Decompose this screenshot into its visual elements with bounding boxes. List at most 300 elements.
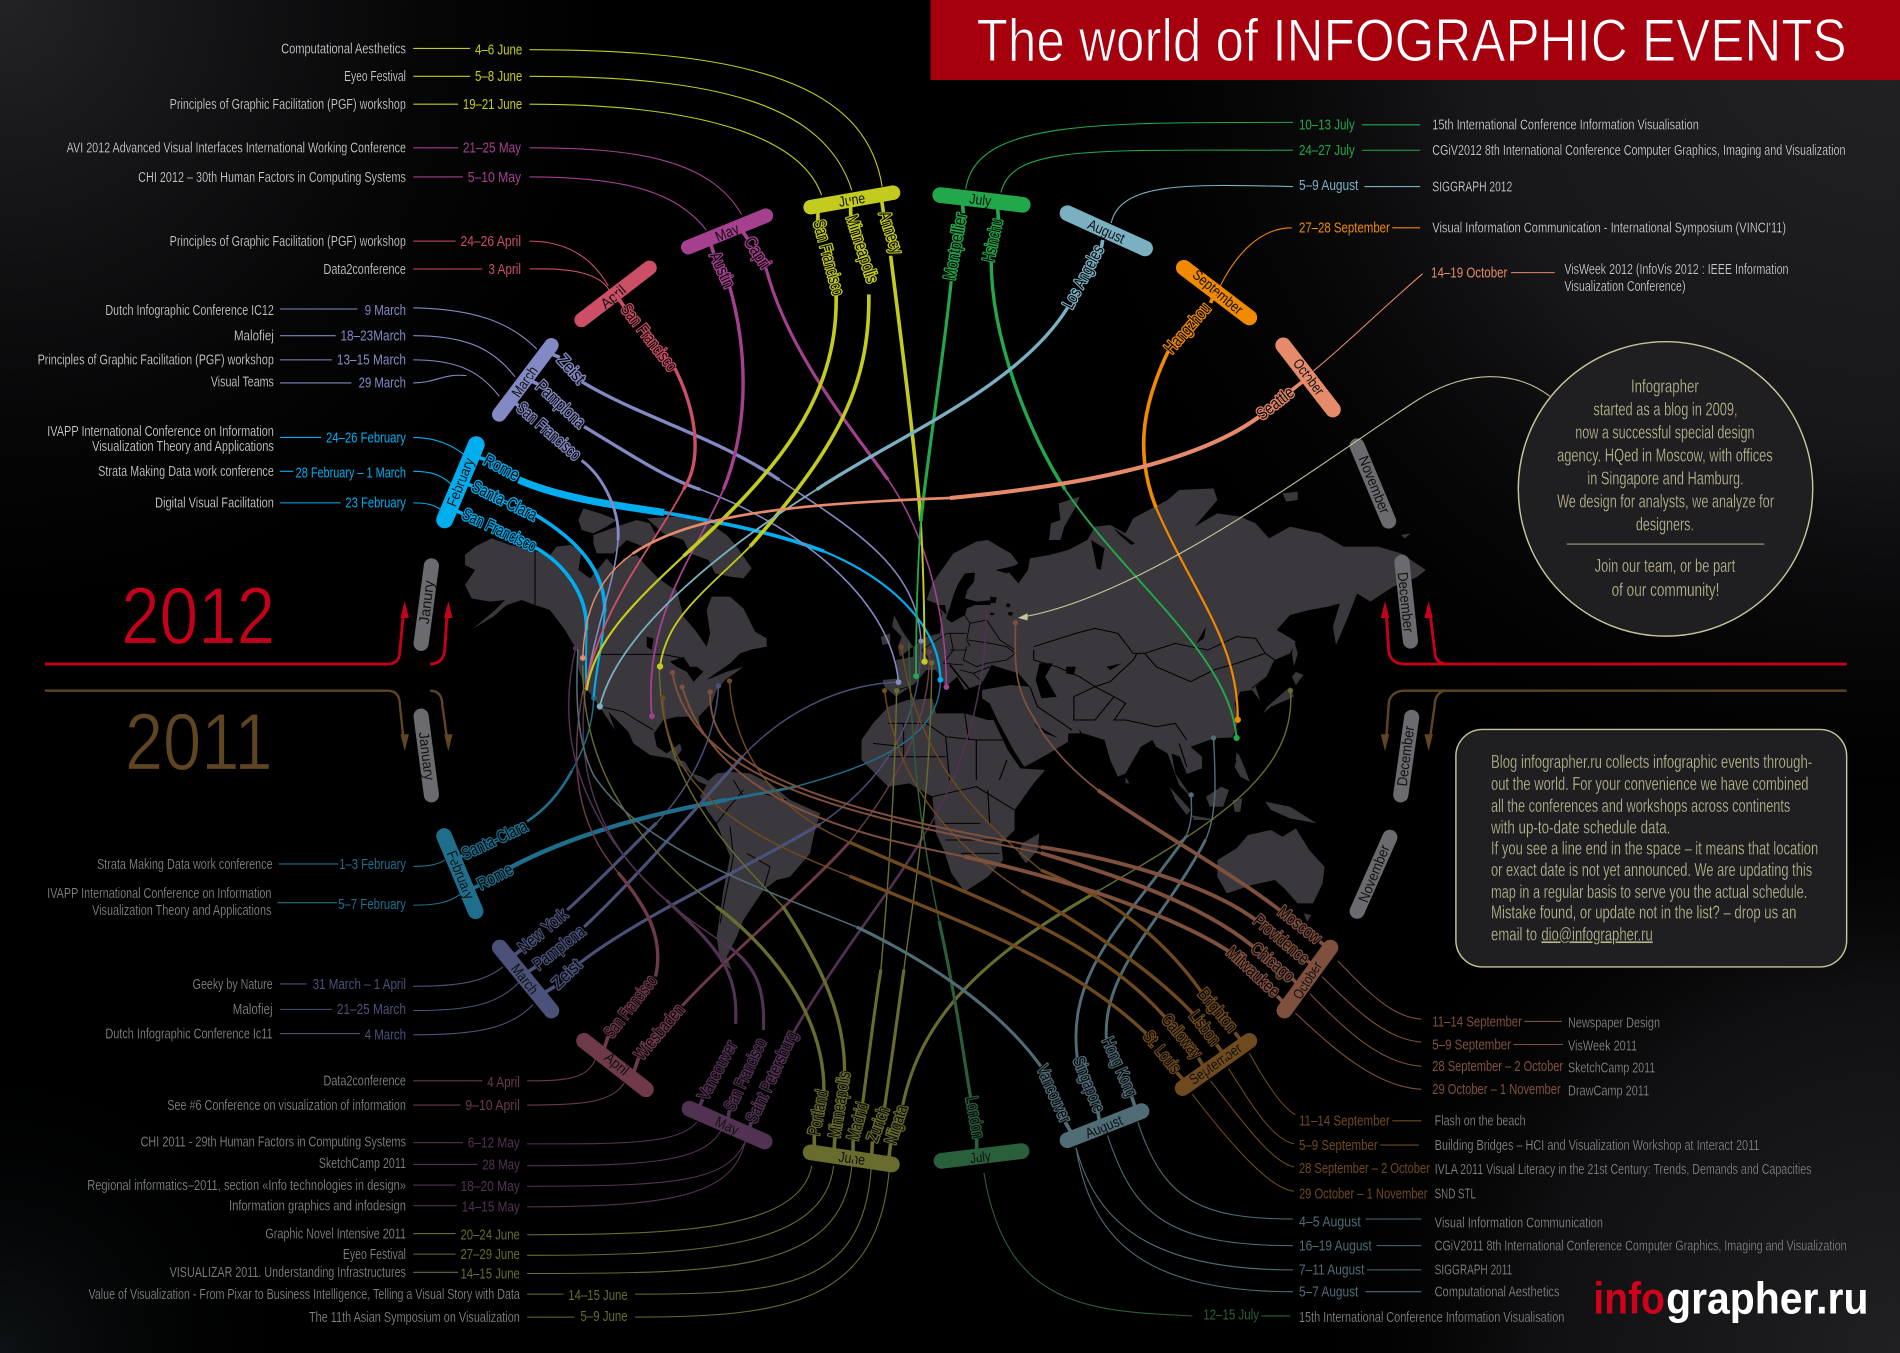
August 2011 bar: August bbox=[1083, 1113, 1125, 1142]
map: Europe detail bbox=[897, 573, 1015, 690]
October 2012 bar bbox=[1283, 345, 1333, 410]
event: Malofiej 2011: 21–25 March bbox=[337, 1001, 406, 1018]
event: VisWeek 2011: VisWeek 2011 bbox=[1568, 1038, 1637, 1055]
event: SIGGRAPH 2011: SIGGRAPH 2011 bbox=[1435, 1262, 1512, 1279]
event: Dutch Infographic Conference 2011 bbox=[105, 1005, 533, 1044]
event: AVI 2012 bbox=[67, 140, 742, 214]
event: Geeky by Nature bbox=[193, 967, 503, 993]
event: See #6: See #6 Conference on visualization of information bbox=[167, 1097, 406, 1114]
event: 15th International Conference 2012: 10–13 July bbox=[1299, 117, 1355, 134]
June 2011 bar bbox=[811, 1149, 892, 1169]
route: Chicago bbox=[670, 670, 1300, 988]
route: Los Angeles: Los Angeles bbox=[1059, 242, 1108, 312]
month: February 2011 bbox=[47, 682, 940, 919]
panel: about Infographer circle: now a successful special design bbox=[1575, 423, 1755, 443]
event: CHI 2011: CHI 2011 - 29th Human Factors in Computing Systems bbox=[141, 1133, 406, 1150]
event: SketchCamp May 2011: SketchCamp 2011 bbox=[319, 1155, 406, 1172]
event: DrawCamp 2011 bbox=[1295, 1013, 1649, 1099]
event: CHI 2012 bbox=[138, 169, 706, 230]
route: Lisbon: Lisbon bbox=[1185, 1007, 1224, 1049]
event: 12–15 July: 12–15 July bbox=[1203, 1307, 1259, 1324]
event: SketchCamp May 2011: 28 May bbox=[482, 1156, 520, 1173]
event: Graphic Novel: 20–24 June bbox=[460, 1227, 520, 1244]
month: December 2011: December bbox=[1395, 725, 1418, 787]
route: Zeist: Zeist bbox=[553, 351, 589, 388]
route: San Francisco bbox=[585, 294, 695, 689]
route: New York: New York bbox=[515, 905, 572, 957]
route: San Francisco: San Francisco bbox=[459, 505, 540, 556]
panel: about Infographer circle: We design for analysts, we analyze for bbox=[1557, 492, 1774, 512]
event: Building Bridges bbox=[1229, 1069, 1759, 1154]
route: Moscow bbox=[1013, 620, 1329, 949]
event: 12–15 July bbox=[984, 1173, 1564, 1326]
route: Chicago: Chicago bbox=[1247, 939, 1298, 986]
event: VINCI bbox=[1220, 220, 1786, 286]
month: March 2012 bbox=[38, 302, 924, 687]
route: San Francisco bbox=[511, 398, 618, 687]
event: Regional informatics: Regional informatics–2011, section «Info technologies in design» bbox=[87, 1177, 406, 1194]
event: SIGGRAPH 2011 bbox=[1076, 1147, 1512, 1279]
event: IVAPP 2012 bbox=[47, 423, 467, 457]
route: Providence bbox=[707, 689, 1315, 968]
route: Montpellier bbox=[913, 200, 971, 679]
July 2012 bar: July bbox=[968, 192, 993, 210]
route: Santa-Clara bbox=[454, 695, 596, 863]
May 2012 bar bbox=[688, 216, 766, 247]
route: Minneapolis bbox=[657, 201, 882, 670]
event: Geeky by Nature: Geeky by Nature bbox=[193, 976, 273, 993]
event: 15th International Conference 2012 bbox=[966, 117, 1699, 189]
route: Milwaukee: Milwaukee bbox=[1223, 943, 1283, 1001]
event: VisWeek 2011: 5–9 September bbox=[1432, 1036, 1511, 1053]
year timeline 2011: 2011 bbox=[125, 697, 273, 787]
event: VisWeek 2012: VisWeek 2012 (InfoVis 2012 : IEEE Information bbox=[1564, 261, 1789, 278]
month: January 2012: Janury bbox=[417, 579, 438, 625]
event: Regional informatics bbox=[87, 1141, 745, 1195]
route: Moscow: Moscow bbox=[1274, 902, 1325, 948]
event: SIGGRAPH 2012: SIGGRAPH 2012 bbox=[1432, 178, 1512, 195]
event: Principles of Graphic Facilitation June: 19–21 June bbox=[463, 96, 522, 113]
March 2012 bar: March bbox=[509, 364, 542, 401]
route: Zeist bbox=[545, 351, 924, 644]
event: Data2conference: 3 April bbox=[488, 261, 521, 278]
month: August 2011 bbox=[577, 649, 1847, 1301]
February 2011 bar: February bbox=[443, 849, 477, 902]
event: Dutch Infographic Conference 2011: 4 March bbox=[365, 1027, 406, 1044]
event: Computational Aesthetics 2011 bbox=[1076, 1147, 1560, 1301]
route: Niigata: Niigata bbox=[881, 1102, 912, 1147]
month: April 2012 bbox=[170, 233, 695, 689]
route: Zeist: Zeist bbox=[548, 955, 586, 993]
event: Visual Teams bbox=[211, 374, 467, 392]
route: Galloway: Galloway bbox=[1158, 1010, 1206, 1063]
event: Principles of Graphic Facilitation June: Principles of Graphic Facilitation (PGF) workshop bbox=[170, 96, 406, 113]
event: IVAPP 2011: IVAPP International Conference on Information bbox=[47, 885, 271, 902]
event: Newspaper Design bbox=[1338, 961, 1660, 1032]
June 2012 bar bbox=[811, 191, 893, 211]
event: Flash on the beach bbox=[1249, 1053, 1526, 1130]
month: October 2011 bbox=[670, 620, 1660, 1099]
event: Visual Teams: Visual Teams bbox=[211, 374, 274, 391]
event: AVI 2012: AVI 2012 Advanced Visual Interfaces International Working Conference bbox=[67, 140, 406, 157]
event: Strata 2012: 28 February – 1 March bbox=[296, 464, 406, 481]
route: Rome: Rome bbox=[474, 860, 516, 894]
event: Eyeo Festival: Eyeo Festival bbox=[344, 68, 406, 85]
event: Dutch Infographic Conference: Dutch Infographic Conference IC12 bbox=[105, 302, 274, 319]
event: Value of Visualization bbox=[88, 1168, 871, 1304]
event: Principles of Graphic Facilitation April bbox=[170, 233, 608, 286]
month: July 2012 bbox=[913, 117, 1845, 741]
route: Santa-Clara: Santa-Clara bbox=[459, 816, 531, 863]
July 2011 bar: July bbox=[969, 1149, 992, 1167]
event: SketchCamp May 2011 bbox=[319, 1131, 721, 1173]
event: Principles of Graphic Facilitation March: Principles of Graphic Facilitation (PGF) workshop bbox=[38, 352, 274, 369]
route: Pamplona: Pamplona bbox=[532, 377, 590, 432]
event: VISUALIZAR: 14–15 June bbox=[460, 1265, 520, 1282]
event: IVAPP 2011 bbox=[47, 885, 460, 919]
event: Data2conference: Data2conference bbox=[324, 261, 406, 278]
event: Information graphics: 14–15 May bbox=[462, 1199, 520, 1216]
panel: about Infographer circle: in Singapore and Hamburg. bbox=[1587, 469, 1744, 489]
event: Dutch Infographic Conference 2011: Dutch Infographic Conference Ic11 bbox=[105, 1025, 273, 1042]
route: Rome: Rome bbox=[481, 450, 523, 485]
event: VisWeek 2012 bbox=[1314, 261, 1789, 371]
event: CGiV2011 bbox=[1108, 1135, 1847, 1254]
route: Vancouver bbox=[577, 649, 1075, 1137]
route: Saint Petersburg: Saint Petersburg bbox=[742, 1028, 801, 1126]
event: Strata 2011: 1–3 February bbox=[339, 856, 406, 873]
event: VisWeek 2012: 14–19 October bbox=[1431, 264, 1507, 281]
route: Minneapolis: Minneapolis bbox=[825, 1070, 854, 1139]
event: Visual Teams: 29 March bbox=[359, 375, 406, 392]
event: Principles of Graphic Facilitation March bbox=[38, 352, 499, 396]
March 2011 bar bbox=[500, 948, 551, 1011]
panel: about the blog: dio@infographer.ru bbox=[1541, 924, 1653, 944]
route: Rome bbox=[468, 450, 943, 683]
month: October 2012 bbox=[580, 261, 1789, 661]
month: May 2012 bbox=[67, 140, 949, 719]
event: Newspaper Design: 11–14 September bbox=[1432, 1013, 1522, 1030]
panel: about Infographer circle: Infographer bbox=[1631, 377, 1699, 397]
event: CHI 2012: 5–10 May bbox=[468, 169, 521, 186]
month: June 2012 bbox=[170, 40, 928, 691]
event: VISUALIZAR bbox=[170, 1166, 852, 1282]
event: IVAPP 2011: Visualization Theory and Applications bbox=[92, 902, 272, 919]
event: Flash on the beach: Flash on the beach bbox=[1435, 1113, 1526, 1130]
event: CHI 2011: 6–12 May bbox=[468, 1134, 520, 1151]
event: Strata 2011: Strata Making Data work conference bbox=[97, 856, 273, 873]
event: Visual Information Communication: 4–5 August bbox=[1299, 1213, 1361, 1230]
August 2011 bar bbox=[1068, 1111, 1141, 1142]
event: Principles of Graphic Facilitation March: 13–15 March bbox=[337, 352, 406, 369]
month: February 2012 bbox=[47, 423, 943, 697]
route: Minneapolis bbox=[659, 666, 854, 1156]
route: Pamplona bbox=[527, 377, 901, 685]
route: Annecy: Annecy bbox=[875, 209, 907, 257]
route: Hangzhou bbox=[1144, 292, 1241, 723]
route: Seattle: Seattle bbox=[1253, 383, 1298, 424]
route: San Francisco: San Francisco bbox=[617, 300, 681, 375]
event: Building Bridges: Building Bridges – HCI and Visualization Workshop at Interact 2011 bbox=[1435, 1137, 1759, 1154]
panel: about Infographer circle bbox=[1518, 342, 1813, 636]
event: Strata 2012 bbox=[98, 463, 457, 491]
event: IVAPP 2012: IVAPP International Conference on Information bbox=[47, 423, 274, 440]
event: DrawCamp 2011: DrawCamp 2011 bbox=[1568, 1082, 1649, 1099]
event: Principles of Graphic Facilitation April: Principles of Graphic Facilitation (PGF) workshop bbox=[170, 233, 406, 250]
route: Vancouver bbox=[569, 646, 741, 1112]
event: IVLA 2011: 28 September – 2 October bbox=[1299, 1160, 1430, 1177]
month: December 2012: December bbox=[1394, 571, 1416, 633]
route: Hangzhou: Hangzhou bbox=[1160, 299, 1215, 357]
event: Computational Aesthetics 2011: 5–7 August bbox=[1299, 1284, 1359, 1301]
callout pointer to Moscow bbox=[1018, 377, 1550, 620]
event: See #6 bbox=[167, 1083, 624, 1114]
August 2012 bar bbox=[1068, 213, 1145, 248]
event: Malofiej: Malofiej bbox=[234, 327, 274, 344]
event: Information graphics bbox=[229, 1141, 745, 1216]
route: San Francisco bbox=[583, 691, 770, 1126]
year timeline 2012 bbox=[45, 571, 1847, 664]
event: SND STL bbox=[1192, 1094, 1476, 1202]
route: London bbox=[909, 642, 988, 1157]
route: St. Louis bbox=[660, 695, 1187, 1084]
world map bbox=[465, 488, 1426, 970]
event: Malofiej: 18–23March bbox=[341, 327, 406, 344]
logo: infographer.ru: info bbox=[1593, 1272, 1665, 1323]
route: San Francisco: San Francisco bbox=[720, 1035, 770, 1114]
month: September 2012 bbox=[1144, 220, 1786, 723]
July 2012 bar bbox=[940, 192, 1023, 210]
route: Los Angeles bbox=[597, 240, 1108, 710]
event: SIGGRAPH 2011: 7–11 August bbox=[1299, 1262, 1365, 1279]
route: Galloway bbox=[727, 678, 1207, 1072]
map: Americas bbox=[465, 508, 820, 970]
event: CHI 2011 bbox=[141, 1122, 697, 1151]
panel: about Infographer circle: started as a blog in 2009, bbox=[1593, 400, 1738, 420]
event: 11th Asian Symposium: The 11th Asian Symposium on Visualization bbox=[309, 1309, 520, 1326]
route: Austin bbox=[649, 239, 743, 719]
panel: about the blog bbox=[1456, 729, 1847, 967]
event: 11th Asian Symposium bbox=[309, 1168, 889, 1326]
month: November 2011: November bbox=[1356, 843, 1394, 905]
event: Data2conference 2011: 4 April bbox=[487, 1074, 520, 1091]
event: IVAPP 2011: 5–7 February bbox=[338, 896, 406, 913]
event: VisWeek 2011 bbox=[1322, 977, 1637, 1055]
route: Brighton: Brighton bbox=[1194, 985, 1241, 1036]
route: Vancouver: Vancouver bbox=[694, 1037, 741, 1103]
route: Portland: Portland bbox=[804, 1088, 832, 1137]
event: CGiV2012: 24–27 July bbox=[1299, 142, 1355, 159]
route: Rome bbox=[468, 682, 940, 894]
event: Information graphics: Information graphics and infodesign bbox=[229, 1198, 406, 1215]
panel: about Infographer circle: agency. HQed in Moscow, with offices bbox=[1557, 446, 1773, 466]
event: VISUALIZAR: VISUALIZAR 2011. Understanding Infrastructures bbox=[170, 1264, 406, 1281]
panel: about Infographer circle: Join our team, or be part bbox=[1595, 556, 1735, 576]
event: CHI 2012: CHI 2012 – 30th Human Factors in Computing Systems bbox=[138, 169, 406, 186]
route: San Francisco bbox=[452, 505, 587, 689]
September 2012 bar: September bbox=[1189, 267, 1246, 318]
route: San Francisco: San Francisco bbox=[809, 218, 848, 298]
panel: about the blog: email to bbox=[1491, 924, 1537, 944]
event: Principles of Graphic Facilitation April: 24–26 April bbox=[460, 233, 521, 250]
route: San Francisco bbox=[577, 691, 661, 1054]
month: June 2011 bbox=[88, 660, 1293, 1326]
month: March 2011 bbox=[105, 643, 921, 1044]
April 2012 bar bbox=[582, 268, 649, 320]
route: Singapore bbox=[1069, 792, 1194, 1127]
route: Montpellier: Montpellier bbox=[940, 211, 971, 281]
route: Seattle bbox=[580, 377, 1309, 661]
logo: infographer.ru bbox=[1593, 1272, 1868, 1323]
event: Eyeo 2011: Eyeo Festival bbox=[343, 1246, 406, 1263]
April 2011 bar: April bbox=[601, 1050, 632, 1079]
panel: about Infographer circle: designers. bbox=[1636, 515, 1694, 535]
event: CGiV2012 bbox=[1001, 142, 1845, 193]
route: Santa-Clara bbox=[460, 477, 605, 697]
May 2012 bar: May bbox=[713, 221, 742, 246]
route: Pamplona bbox=[526, 682, 898, 974]
event: SketchCamp 2011 bbox=[1310, 994, 1655, 1076]
event: Computational Aesthetics bbox=[281, 40, 882, 187]
event: Geeky by Nature: 31 March – 1 April bbox=[313, 976, 406, 993]
March 2011 bar: March bbox=[507, 961, 541, 998]
month: April 2011 bbox=[167, 649, 932, 1114]
April 2012 bar: April bbox=[598, 282, 630, 313]
month: January 2011: January bbox=[415, 731, 437, 782]
July 2011 bar bbox=[942, 1149, 1021, 1167]
route: London: London bbox=[962, 1095, 988, 1140]
event: Graphic Novel bbox=[265, 1166, 812, 1244]
event: 15th International Conference 2012: 15th International Conference Information Visualisation bbox=[1432, 117, 1699, 134]
event: Malofiej bbox=[234, 327, 515, 377]
route: Providence: Providence bbox=[1250, 911, 1313, 968]
month: January 2011 bbox=[415, 716, 437, 795]
event: Building Bridges: 5–9 September bbox=[1299, 1137, 1378, 1154]
event: Eyeo Festival bbox=[344, 68, 852, 190]
event: Flash on the beach: 11–14 September bbox=[1299, 1113, 1390, 1130]
February 2012 bar: February bbox=[444, 455, 478, 509]
event: Digital Visual Facilitation: 23 February bbox=[345, 495, 406, 512]
route: Capri bbox=[739, 227, 949, 690]
panel: about Infographer circle: of our community! bbox=[1612, 580, 1719, 600]
event: Graphic Novel: Graphic Novel Intensive 2011 bbox=[265, 1225, 406, 1242]
event: Eyeo 2011 bbox=[343, 1166, 834, 1263]
May 2011 bar bbox=[689, 1109, 765, 1141]
route: Hsinchu bbox=[979, 204, 1240, 741]
event: Regional informatics: 18–20 May bbox=[460, 1178, 520, 1195]
event: SketchCamp 2011: SketchCamp 2011 bbox=[1568, 1059, 1655, 1076]
route: Lisbon bbox=[882, 688, 1226, 1058]
month: September 2011 bbox=[660, 644, 1812, 1202]
event: Malofiej 2011: Malofiej bbox=[233, 1001, 273, 1018]
route: Austin: Austin bbox=[706, 249, 739, 291]
event: SND STL: SND STL bbox=[1435, 1185, 1476, 1202]
event: Strata 2012: Strata Making Data work conference bbox=[98, 463, 274, 480]
event: Visual Information Communication bbox=[1138, 1122, 1603, 1231]
event: Computational Aesthetics 2011: Computational Aesthetics bbox=[1435, 1284, 1560, 1301]
event: 12–15 July: 15th International Conference Information Visualisation bbox=[1299, 1309, 1564, 1326]
route: New York bbox=[511, 683, 721, 957]
event: Data2conference bbox=[324, 261, 610, 291]
route: Santa-Clara: Santa-Clara bbox=[469, 477, 541, 525]
event: Dutch Infographic Conference bbox=[105, 302, 537, 349]
April 2011 bar bbox=[584, 1041, 646, 1089]
event: SIGGRAPH 2012 bbox=[1111, 177, 1512, 223]
route: Portland bbox=[583, 665, 832, 1154]
route: Brighton bbox=[899, 644, 1244, 1044]
March 2012 bar bbox=[499, 345, 551, 414]
month: May 2011 bbox=[87, 607, 986, 1216]
event: Visual Information Communication: Visual Information Communication bbox=[1435, 1214, 1603, 1231]
month: January 2012 bbox=[417, 566, 438, 643]
event: SIGGRAPH 2012: 5–9 August bbox=[1299, 177, 1359, 194]
event: Principles of Graphic Facilitation June bbox=[170, 96, 822, 195]
event: VisWeek 2012: Visualization Conference) bbox=[1564, 278, 1686, 295]
route: Wiesbaden: Wiesbaden bbox=[631, 1000, 688, 1064]
event: SND STL: 29 October – 1 November bbox=[1299, 1185, 1427, 1202]
route: Niigata bbox=[881, 688, 1293, 1163]
event: SketchCamp 2011: 28 September – 2 October bbox=[1432, 1058, 1563, 1075]
event: AVI 2012: 21–25 May bbox=[463, 140, 521, 157]
August 2012 bar: August bbox=[1085, 217, 1127, 247]
route: Vancouver: Vancouver bbox=[1033, 1062, 1075, 1125]
June 2011 bar: June bbox=[837, 1149, 866, 1169]
event: CGiV2011: 16–19 August bbox=[1299, 1237, 1372, 1254]
event: 11th Asian Symposium: 5–9 June bbox=[580, 1308, 628, 1325]
May 2011 bar: May bbox=[712, 1114, 742, 1139]
event: Newspaper Design: Newspaper Design bbox=[1568, 1015, 1660, 1032]
event: VINCI: 27–28 September bbox=[1299, 220, 1390, 237]
route: Singapore: Singapore bbox=[1069, 1054, 1108, 1115]
route: Saint Petersburg bbox=[742, 607, 986, 1134]
October 2011 bar: October bbox=[1290, 959, 1326, 1002]
route: San Francisco: San Francisco bbox=[600, 972, 661, 1041]
route: Madrid bbox=[843, 688, 899, 1160]
event: IVLA 2011 bbox=[1211, 1081, 1812, 1178]
route: Annecy bbox=[875, 195, 928, 665]
route: Zurich bbox=[863, 660, 934, 1162]
grey months without events bbox=[415, 446, 1418, 911]
route: Capri: Capri bbox=[740, 233, 775, 272]
event: Computational Aesthetics: 4–6 June bbox=[475, 42, 522, 59]
route: San Francisco: San Francisco bbox=[513, 398, 585, 464]
event: IVAPP 2012: 24–26 February bbox=[326, 429, 406, 446]
route: Pamplona: Pamplona bbox=[529, 921, 589, 974]
event: Computational Aesthetics: Computational Aesthetics bbox=[281, 40, 406, 57]
event: See #6: 9–10 April bbox=[465, 1097, 520, 1114]
June 2012 bar: June bbox=[838, 191, 866, 211]
route: Zurich: Zurich bbox=[863, 1104, 893, 1144]
month: November 2012: November bbox=[1355, 454, 1392, 516]
map: Eurasia, Africa, Australia bbox=[862, 488, 1426, 922]
route: San Francisco bbox=[586, 206, 848, 691]
event: Data2conference 2011 bbox=[324, 1058, 596, 1091]
route: Hong Kong bbox=[1098, 735, 1216, 1112]
event: IVAPP 2012: Visualization Theory and Applications bbox=[92, 438, 274, 455]
route: Madrid: Madrid bbox=[843, 1100, 872, 1143]
event: DrawCamp 2011: 29 October – 1 November bbox=[1432, 1081, 1561, 1098]
logo: infographer.ru: grapher.ru bbox=[1666, 1272, 1868, 1323]
month: August 2012 bbox=[597, 177, 1512, 710]
route: Minneapolis: Minneapolis bbox=[842, 213, 882, 285]
route: St. Louis: St. Louis bbox=[1139, 1027, 1185, 1077]
event: Digital Visual Facilitation: Digital Visual Facilitation bbox=[155, 495, 274, 512]
route: Hsinchu: Hsinchu bbox=[979, 217, 1006, 264]
event: Data2conference 2011: Data2conference bbox=[324, 1073, 406, 1090]
event: Malofiej 2011 bbox=[233, 983, 519, 1018]
event: Value of Visualization: Value of Visualization - From Pixar to Business Intelligence, Telling a Visual Story with Data bbox=[88, 1286, 520, 1303]
event: Value of Visualization: 14–15 June bbox=[568, 1287, 628, 1304]
